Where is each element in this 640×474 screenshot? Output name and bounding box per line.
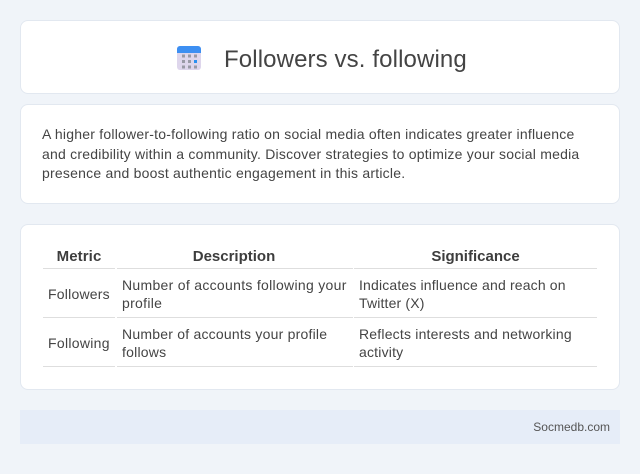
row: followers: Number of accounts following your — [122, 277, 347, 293]
row: following: follows — [122, 344, 166, 360]
row: followers: Followers — [48, 286, 110, 302]
row: following: Number of accounts your profile — [122, 326, 327, 342]
panel: description — [20, 104, 620, 204]
row: following: activity — [359, 344, 403, 360]
intro text — [42, 126, 580, 181]
row: followers — [48, 277, 566, 311]
table header: Metric — [57, 248, 101, 265]
icon: calendar — [177, 46, 201, 70]
footer credit: Socmedb.com — [533, 420, 610, 434]
row: following: Following — [48, 335, 110, 351]
table header — [57, 248, 520, 265]
row: following — [48, 326, 572, 360]
panel: comparison table — [20, 224, 620, 390]
row: followers: Indicates influence and reach on — [359, 277, 566, 293]
table header: Significance — [431, 248, 520, 265]
footer bar — [20, 410, 620, 444]
intro text: presence and boost authentic engagement in this article. — [42, 165, 405, 181]
intro text: and credibility within a community. Discover strategies to optimize your social media — [42, 146, 579, 162]
intro text: A higher follower-to-following ratio on social media often indicates greater influence — [42, 126, 575, 142]
row: followers: Twitter (X) — [359, 295, 425, 311]
table header: Description — [193, 248, 275, 265]
title: Followers vs. following — [224, 46, 467, 73]
panel: title card — [20, 20, 620, 94]
row: followers: profile — [122, 295, 162, 311]
row: following: Reflects interests and networking — [359, 326, 572, 342]
